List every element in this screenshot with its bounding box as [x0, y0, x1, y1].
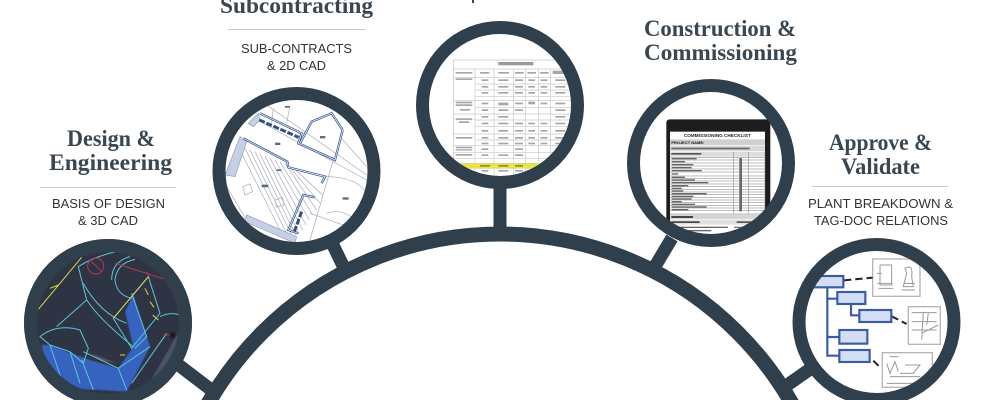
- dashed links: [844, 278, 907, 367]
- tree nodes: [812, 276, 891, 362]
- subtitle: approve: PLANT BREAKDOWN &: [808, 196, 953, 211]
- icon: design 3D CAD circle: [24, 239, 195, 400]
- icon: blueprint circle: [218, 93, 374, 249]
- heading: construction: Construction &: [644, 16, 796, 41]
- top heading fragment: [472, 0, 474, 3]
- subtitle: design: BASIS OF DESIGN: [52, 196, 165, 211]
- subtitle: subcontracting: SUB-CONTRACTS: [241, 41, 352, 56]
- heading block: design and engineering: & 3D CAD: [78, 213, 138, 228]
- connectors from circles to arc: [176, 185, 813, 392]
- heading block: approve and validate: TAG-DOC RELATIONS: [814, 213, 948, 228]
- heading block: construction and commissioning: [644, 16, 797, 65]
- heading block: design and engineering: [40, 126, 176, 228]
- icon: table document circle: [422, 27, 578, 183]
- checklist project name: PROJECT NAME:: [671, 140, 704, 145]
- heading block: subcontracting: [220, 0, 374, 73]
- icon: commissioning checklist tablet circle: [633, 85, 789, 249]
- heading: design: Design &: [67, 126, 155, 151]
- heading block: subcontracting: & 2D CAD: [267, 58, 326, 73]
- tree connectors: [827, 287, 859, 356]
- heading: approve: Approve &: [829, 130, 932, 155]
- central arc: [164, 234, 836, 400]
- heading block: approve and validate: [808, 130, 953, 228]
- document thumbnails: [873, 259, 940, 387]
- heading block: construction and commissioning: Commissioning: [644, 40, 797, 65]
- checklist title: COMMISSIONING CHECKLIST: [684, 133, 751, 138]
- heading block: design and engineering: Engineering: [49, 150, 173, 175]
- heading block: approve and validate: Validate: [841, 154, 920, 179]
- icon: plant breakdown tree circle: [798, 244, 954, 400]
